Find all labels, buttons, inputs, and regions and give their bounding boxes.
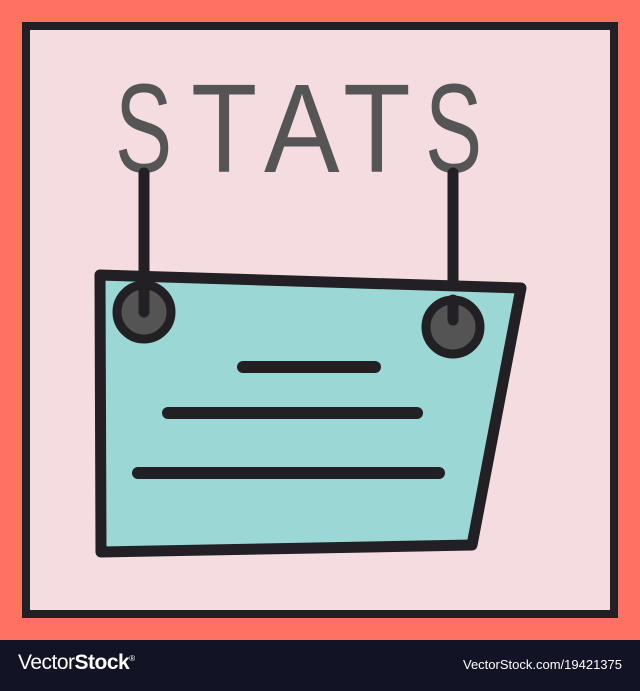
title: S: [425, 57, 482, 199]
title: T: [191, 58, 257, 199]
text lines: [138, 367, 439, 473]
title: A: [264, 58, 340, 199]
title: S: [115, 57, 172, 199]
panel: frame: [26, 26, 614, 614]
board: [100, 275, 521, 552]
logo: VectorStock®: [18, 651, 135, 674]
strings: [144, 173, 453, 325]
footer bar: [0, 640, 640, 691]
title: T: [343, 59, 411, 200]
url: VectorStock.com/19421375: [463, 657, 622, 672]
sign: [100, 173, 521, 552]
pins: [117, 285, 171, 339]
title: [115, 57, 482, 200]
